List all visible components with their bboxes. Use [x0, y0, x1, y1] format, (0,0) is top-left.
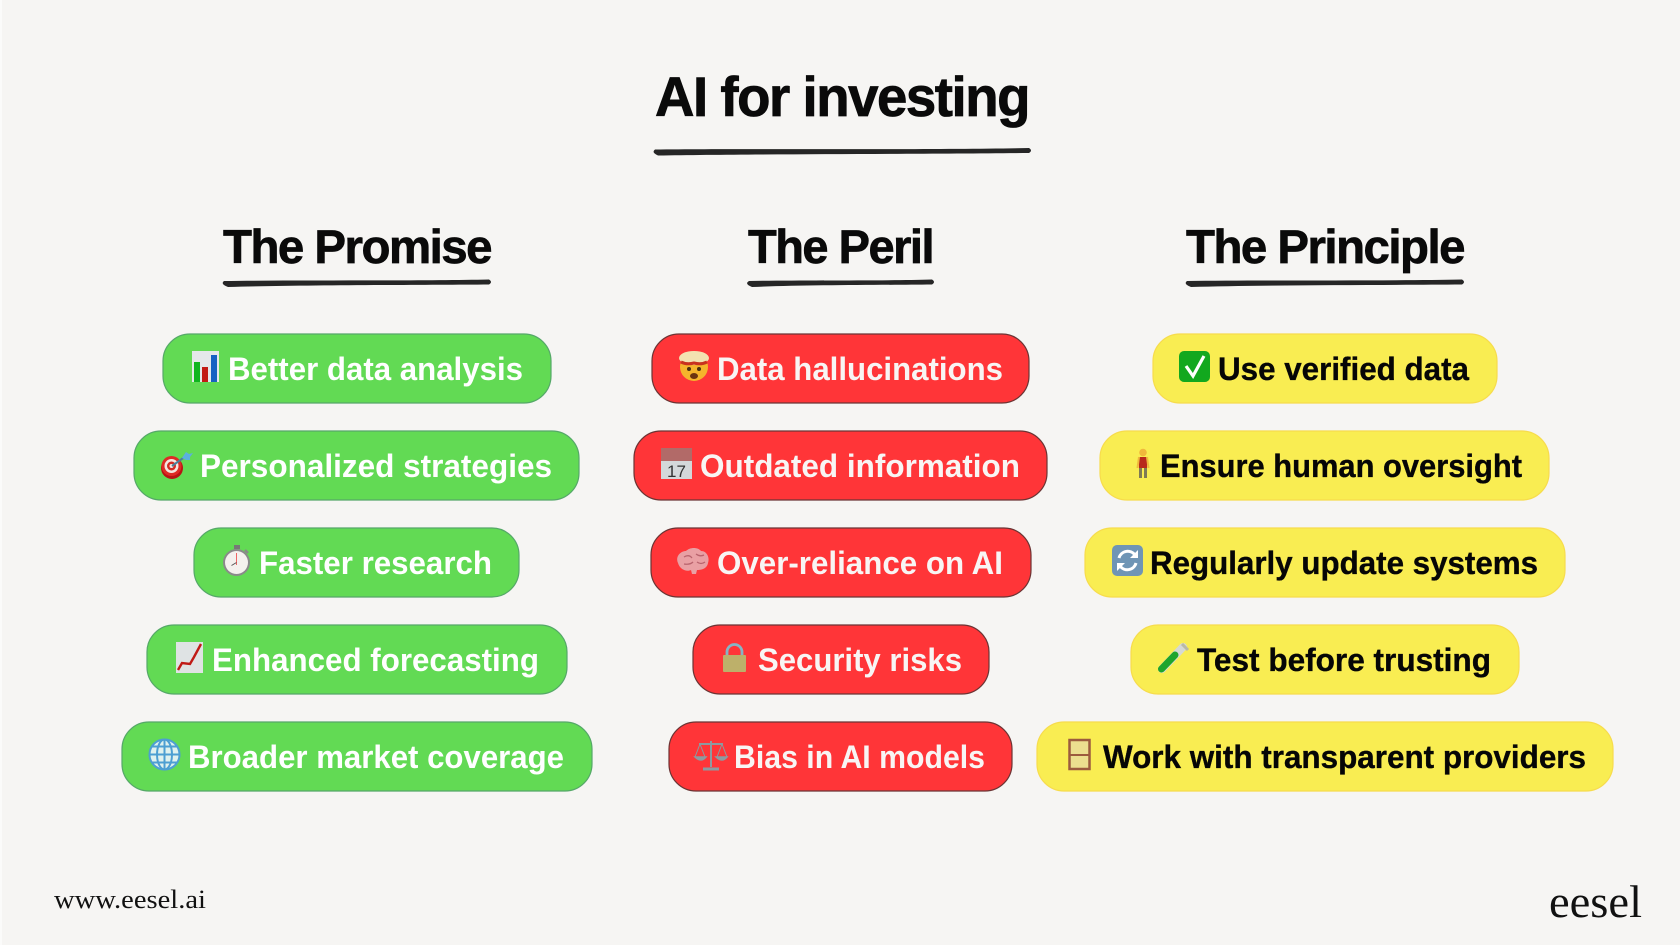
icon: bar chart: [192, 351, 219, 382]
icon: exploding head: [679, 351, 709, 381]
pill: Over-reliance on AI: [651, 528, 1031, 597]
pill: Personalized strategies: [134, 431, 579, 500]
pill: Security risks: [693, 625, 989, 694]
label: Enhanced forecasting: [212, 642, 539, 678]
icon: person standing: [1138, 449, 1148, 478]
label: Security risks: [758, 642, 962, 678]
heading: The Peril: The Peril: [748, 220, 933, 273]
label: Ensure human oversight: [1160, 448, 1522, 484]
heading: The Promise: The Promise: [223, 220, 491, 273]
title: [654, 65, 1031, 156]
label: Work with transparent providers: [1103, 739, 1586, 775]
icon: calendar: 17: [667, 462, 686, 481]
label: Broader market coverage: [188, 739, 564, 775]
icon: window: [1070, 740, 1090, 769]
icon: chart increasing: [176, 642, 203, 673]
pill: Test before trusting: [1131, 625, 1519, 694]
icon: test tube: [1162, 644, 1188, 669]
pill: Outdated information: [634, 431, 1047, 500]
icon: check mark: [1179, 351, 1210, 382]
label: Test before trusting: [1197, 642, 1491, 678]
pill: Use verified data: [1153, 334, 1497, 403]
heading: The Principle: The Principle: [1186, 220, 1464, 273]
icon: brain: [677, 548, 709, 574]
icon: balance scale: [695, 741, 727, 769]
title: AI for investing: [655, 65, 1029, 128]
label: Better data analysis: [228, 351, 523, 387]
footer: website: www.eesel.ai: [54, 885, 206, 914]
pill: Regularly update systems: [1085, 528, 1565, 597]
label: Bias in AI models: [734, 739, 985, 775]
panel: The Promise: [122, 220, 592, 791]
icon: dart target: [161, 452, 193, 479]
footer: eesel logo: eesel: [1549, 877, 1642, 927]
icon: refresh arrows: [1112, 545, 1143, 576]
label: Personalized strategies: [200, 448, 552, 484]
pill: Broader market coverage: [122, 722, 592, 791]
label: Faster research: [259, 545, 492, 581]
pill: Better data analysis: [163, 334, 551, 403]
label: Over-reliance on AI: [717, 545, 1003, 581]
panel: The Peril: [634, 220, 1047, 791]
pill: Enhanced forecasting: [147, 625, 567, 694]
pill: Bias in AI models: [669, 722, 1012, 791]
panel: The Principle: [1037, 220, 1613, 791]
pill: Faster research: [194, 528, 519, 597]
icon: lock: [723, 644, 746, 672]
pill: Data hallucinations: [652, 334, 1029, 403]
label: Outdated information: [700, 448, 1020, 484]
icon: globe: [150, 740, 180, 770]
label: Use verified data: [1218, 351, 1470, 387]
pill: Work with transparent providers: [1037, 722, 1613, 791]
icon: calendar: [661, 448, 692, 481]
pill: Ensure human oversight: [1100, 431, 1549, 500]
icon: stopwatch: [223, 545, 250, 576]
label: Data hallucinations: [717, 351, 1003, 387]
label: Regularly update systems: [1150, 545, 1538, 581]
